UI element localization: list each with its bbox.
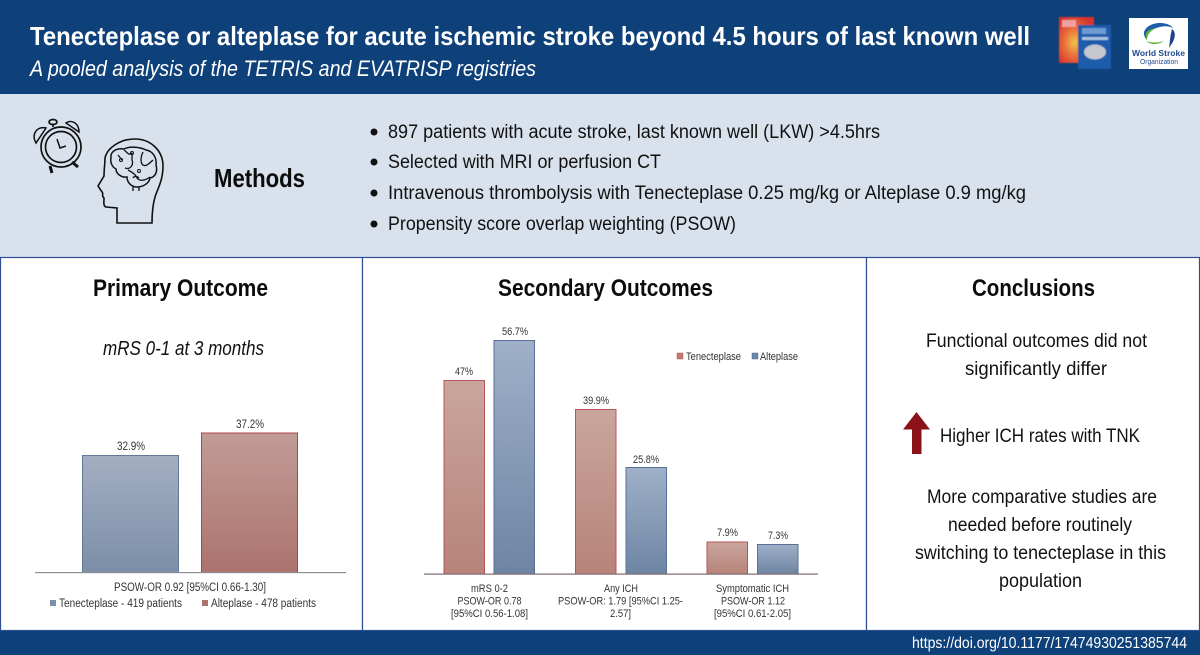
bar chart: secondary: 39.9% (583, 395, 609, 407)
bar chart: primary: 32.9% (117, 441, 145, 453)
conclusion: comparative studies: switching to tenecteplase in this (915, 543, 1166, 564)
conclusion: higher ICH: Higher ICH rates with TNK (940, 426, 1140, 447)
bar chart: secondary: PSOW-OR: 1.79 [95%CI 1.25- (558, 596, 683, 608)
panel: secondary outcomes (362, 258, 866, 630)
panel: primary outcome (0, 258, 362, 630)
conclusion: functional outcomes (926, 331, 1148, 380)
bar chart: secondary (424, 326, 818, 620)
conclusion: functional outcomes: significantly differ (965, 359, 1108, 380)
icon: head with brain (98, 139, 163, 223)
bar chart: secondary: 56.7% (502, 326, 528, 338)
journal covers (1059, 17, 1111, 69)
heading: primary outcome: Primary Outcome (93, 275, 268, 302)
bar chart: secondary: Any ICH (604, 583, 638, 595)
list: methods bullets (370, 122, 1026, 235)
bar chart: primary (35, 419, 346, 610)
list: methods bullets: 897 patients with acute stroke, last known well (LKW) >4.5hrs (388, 122, 880, 143)
subtitle: A pooled analysis of the TETRIS and EVATRISP registries (28, 56, 536, 81)
World Stroke Organization logo: Organization (1140, 59, 1178, 66)
bar chart: secondary: 2.57] (610, 608, 631, 620)
bar chart: primary: Alteplase - 478 patients (211, 598, 316, 610)
conclusion: comparative studies: needed before routinely (948, 515, 1132, 536)
conclusion: comparative studies (915, 487, 1166, 592)
heading: conclusions: Conclusions (972, 275, 1095, 302)
subheading: mRS 0-1 at 3 months (103, 338, 264, 360)
list: methods bullets: Propensity score overlap weighting (PSOW) (388, 214, 736, 235)
conclusion: comparative studies: More comparative studies are (927, 487, 1157, 508)
bar chart: secondary: mRS 0-2 (471, 583, 508, 595)
heading: secondary outcomes: Secondary Outcomes (498, 275, 713, 302)
conclusion: comparative studies: population (999, 571, 1082, 592)
bar chart: secondary: [95%CI 0.56-1.08] (451, 608, 528, 620)
list: methods bullets: Intravenous thrombolysis with Tenecteplase 0.25 mg/kg or Alteplase 0.9 mg/kg (388, 183, 1026, 204)
legend (677, 351, 798, 363)
footer (0, 631, 1200, 655)
list: methods bullets: Selected with MRI or perfusion CT (388, 152, 661, 173)
bar chart: primary: PSOW-OR 0.92 [95%CI 0.66-1.30] (114, 582, 266, 594)
panel: conclusions (866, 258, 1200, 630)
bar chart: primary: Tenecteplase - 419 patients (59, 598, 182, 610)
panel: methods (0, 94, 1200, 257)
bar chart: secondary: [95%CI 0.61-2.05] (714, 608, 791, 620)
bar chart: secondary: 47% (455, 366, 473, 378)
title: Tenecteplase or alteplase for acute ischemic stroke beyond 4.5 hours of last known well (30, 21, 1030, 51)
World Stroke Organization logo: World Stroke (1132, 49, 1186, 58)
World Stroke Organization logo (1129, 18, 1188, 69)
legend: Tenecteplase (686, 351, 741, 363)
bar chart: secondary: 25.8% (633, 454, 659, 466)
icon: up arrow (903, 412, 930, 454)
bar chart: primary: 37.2% (236, 419, 264, 431)
heading: Methods: Methods (214, 163, 305, 193)
bar chart: secondary: PSOW-OR 1.12 (721, 596, 785, 608)
bar chart: secondary: Symptomatic ICH (716, 583, 789, 595)
legend: Alteplase (760, 351, 798, 363)
header banner (0, 0, 1200, 94)
bar chart: secondary: PSOW-OR 0.78 (458, 596, 522, 608)
bar chart: secondary: 7.9% (717, 527, 738, 539)
bar chart: secondary: 7.3% (768, 530, 788, 542)
icon: alarm clock (34, 120, 81, 173)
conclusion: functional outcomes: Functional outcomes did not (926, 331, 1148, 352)
